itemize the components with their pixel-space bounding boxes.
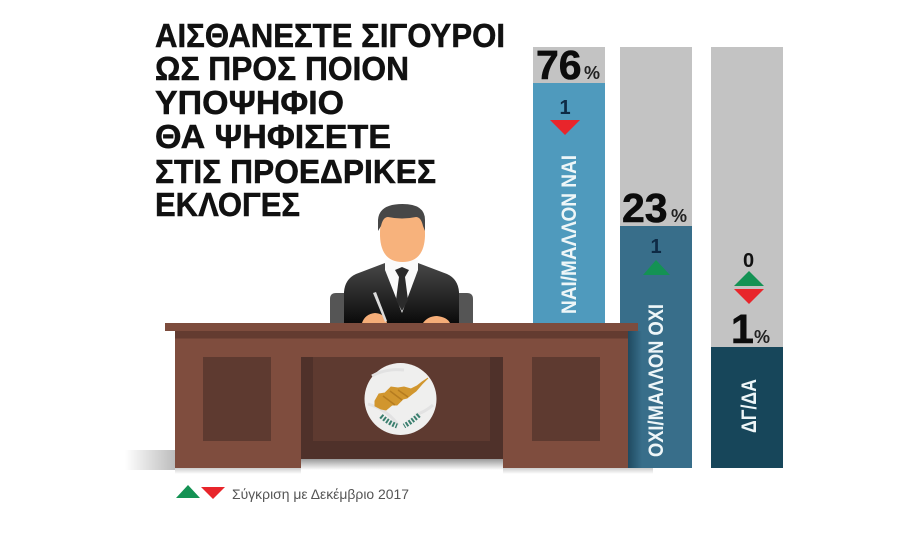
title: ΥΠΟΨΗΦΙΟ [155, 84, 344, 121]
floor shadow [125, 450, 653, 474]
label ΝΑΙ/ΜΑΛΛΟΝ ΝΑΙ: ΝΑΙ/ΜΑΛΛΟΝ ΝΑΙ [558, 155, 581, 314]
emblem: Cyprus flag [364, 363, 436, 435]
value 1%: % [754, 327, 770, 347]
change 1 with green arrow up [643, 236, 670, 275]
left panel [203, 357, 271, 441]
value 76%: 76 [536, 42, 582, 88]
title: ΕΚΛΟΓΕΣ [155, 186, 300, 223]
island [375, 378, 428, 410]
shirt [385, 260, 418, 313]
chair [330, 293, 473, 323]
hair [378, 204, 425, 231]
face [380, 215, 425, 262]
label ΔΓ/ΔΑ: ΔΓ/ΔΑ [738, 379, 761, 433]
change 1 with red arrow down [550, 97, 580, 135]
title: ΣΤΙΣ ΠΡΟΕΔΡΙΚΕΣ [155, 153, 436, 190]
bar: ΔΓ/ΔΑ 1% [711, 47, 783, 468]
change 1 with green arrow up: 1 [650, 236, 662, 258]
title [155, 17, 505, 223]
right panel [532, 357, 600, 441]
value 76%: % [584, 63, 600, 83]
desk [165, 323, 638, 468]
olive branches [381, 415, 419, 426]
title: ΑΙΣΘΑΝΕΣΤΕ ΣΙΓΟΥΡΟΙ [155, 17, 505, 54]
suit [344, 263, 459, 323]
bar: ΝΑΙ/ΜΑΛΛΟΝ ΝΑΙ 76% [533, 42, 605, 328]
title: ΩΣ ΠΡΟΣ ΠΟΙΟΝ [155, 50, 409, 87]
value 1% [731, 306, 770, 352]
pen [373, 292, 387, 322]
label ΟΧΙ/ΜΑΛΛΟΝ ΟΧΙ: ΟΧΙ/ΜΑΛΛΟΝ ΟΧΙ [645, 304, 668, 457]
bar: ΟΧΙ/ΜΑΛΛΟΝ ΟΧΙ 23% [620, 47, 692, 468]
hands [362, 313, 450, 323]
value 1%: 1 [731, 306, 754, 352]
change 1 with red arrow down: 1 [559, 97, 571, 119]
desk top [165, 323, 638, 331]
legend: Σύγκριση με Δεκέμβριο 2017 [232, 486, 409, 502]
tie [395, 267, 409, 311]
change 0 with up and down arrows: 0 [743, 250, 754, 272]
change 0 with up and down arrows [734, 250, 764, 304]
centre recess [301, 357, 503, 459]
value 23%: % [671, 206, 687, 226]
value 23%: 23 [622, 185, 668, 231]
title: ΘΑ ΨΗΦΙΣΕΤΕ [155, 118, 391, 155]
person at desk [330, 204, 473, 323]
